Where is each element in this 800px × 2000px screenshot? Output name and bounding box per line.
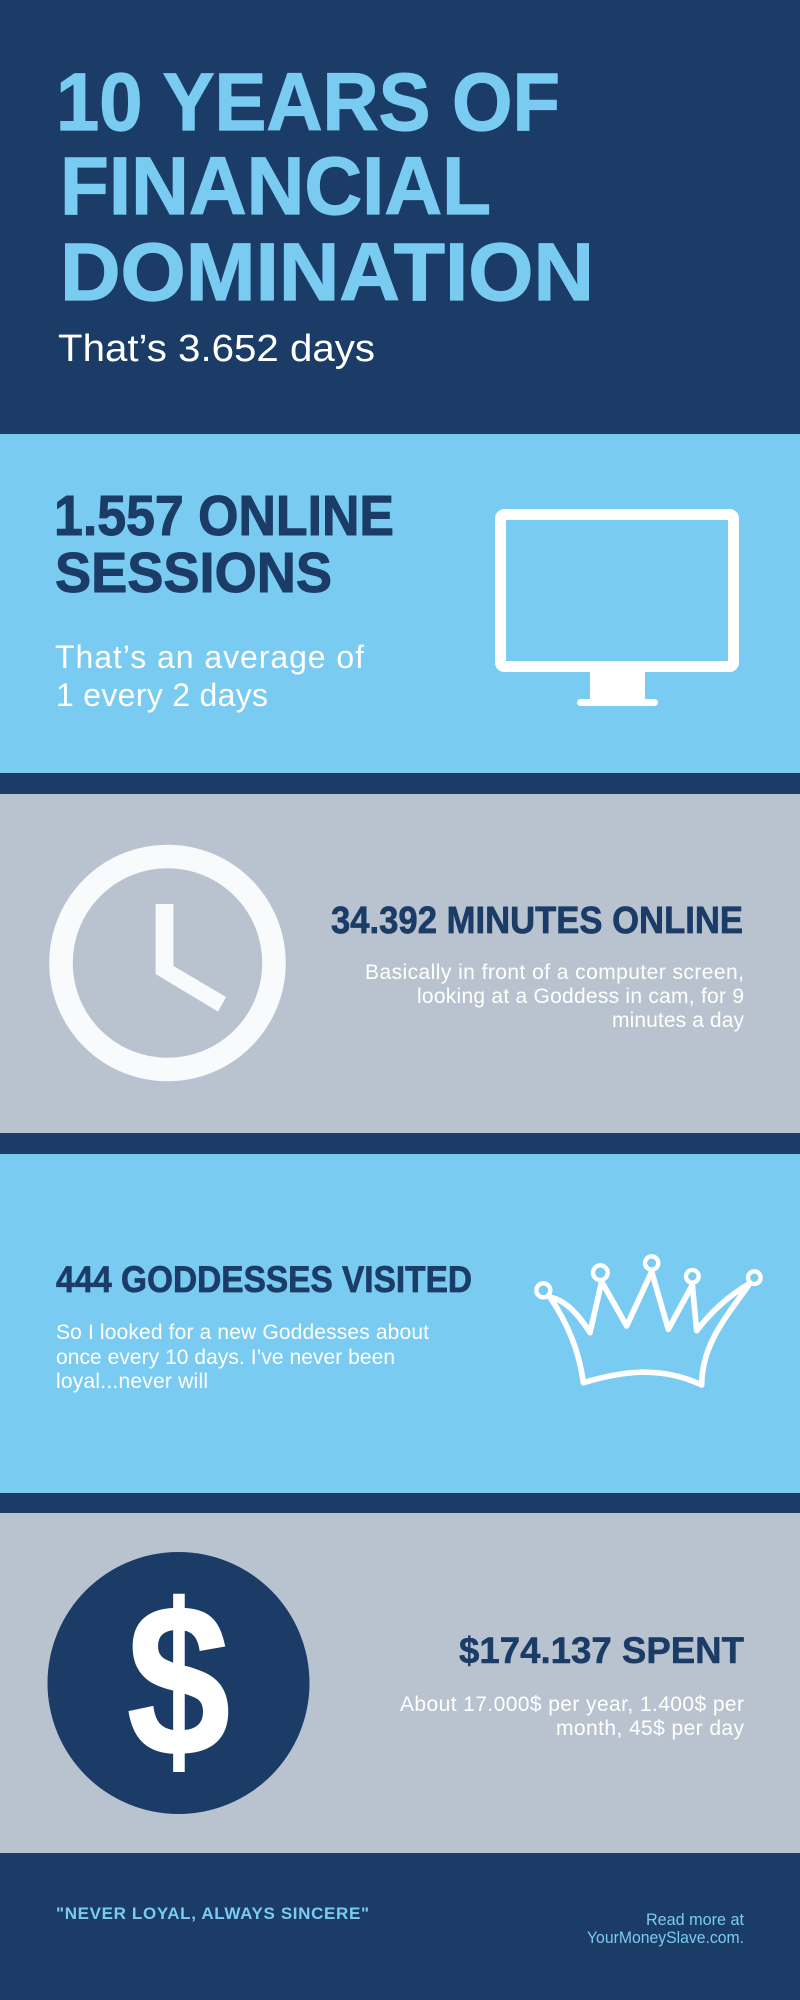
- icon: dollar coin: $: [127, 1559, 230, 1801]
- panel: online sessions: [0, 434, 800, 773]
- heading: minutes online: 34.392 MINUTES ONLINE: [331, 900, 743, 942]
- subtitle: That’s 3.652 days: [58, 328, 375, 370]
- text: goddesses description: once every 10 days. I’ve never been: [56, 1346, 395, 1369]
- text: spending description: About 17.000$ per year, 1.400$ per: [400, 1693, 744, 1716]
- panel: goddesses visited: [0, 1154, 800, 1493]
- text: goddesses description: loyal...never will: [56, 1370, 208, 1393]
- text: session average: 1 every 2 days: [56, 677, 268, 713]
- text: read more link: YourMoneySlave.com.: [587, 1929, 744, 1947]
- text: minutes description: Basically in front of a computer screen,: [365, 961, 744, 984]
- title: FINANCIAL: [60, 141, 491, 232]
- icon: clock: [61, 856, 274, 1070]
- panel: money spent: [0, 1513, 800, 1853]
- text: read more link: Read more at: [646, 1911, 744, 1929]
- title: DOMINATION: [60, 227, 594, 318]
- title: 10 YEARS OF: [56, 57, 560, 148]
- icon: dollar coin: [48, 1552, 310, 1814]
- text: spending description: month, 45$ per day: [556, 1717, 744, 1740]
- quote: "NEVER LOYAL, ALWAYS SINCERE": [56, 1904, 369, 1923]
- text: minutes description: minutes a day: [612, 1009, 744, 1032]
- text: minutes description: looking at a Goddess in cam, for 9: [417, 985, 744, 1008]
- text: session average: That’s an average of: [55, 639, 364, 675]
- heading: online sessions: [54, 484, 394, 605]
- heading: online sessions: SESSIONS: [55, 541, 332, 605]
- text: goddesses description: So I looked for a new Goddesses about: [56, 1321, 429, 1344]
- heading: online sessions: 1.557 ONLINE: [54, 484, 394, 548]
- panel: footer: [0, 1853, 800, 2000]
- text: minutes description: [365, 961, 744, 1032]
- panel: header: [0, 0, 800, 434]
- heading: goddesses visited: 444 GODDESSES VISITED: [56, 1259, 472, 1300]
- text: read more link: [587, 1911, 744, 1947]
- panel: minutes online: [0, 794, 800, 1133]
- icon: computer monitor: [500, 514, 734, 706]
- title: [56, 57, 594, 318]
- text: session average: [55, 639, 364, 713]
- text: spending description: [400, 1693, 744, 1740]
- icon: crown: [536, 1256, 761, 1385]
- text: goddesses description: [56, 1321, 429, 1393]
- heading: money spent: $174.137 SPENT: [459, 1630, 744, 1671]
